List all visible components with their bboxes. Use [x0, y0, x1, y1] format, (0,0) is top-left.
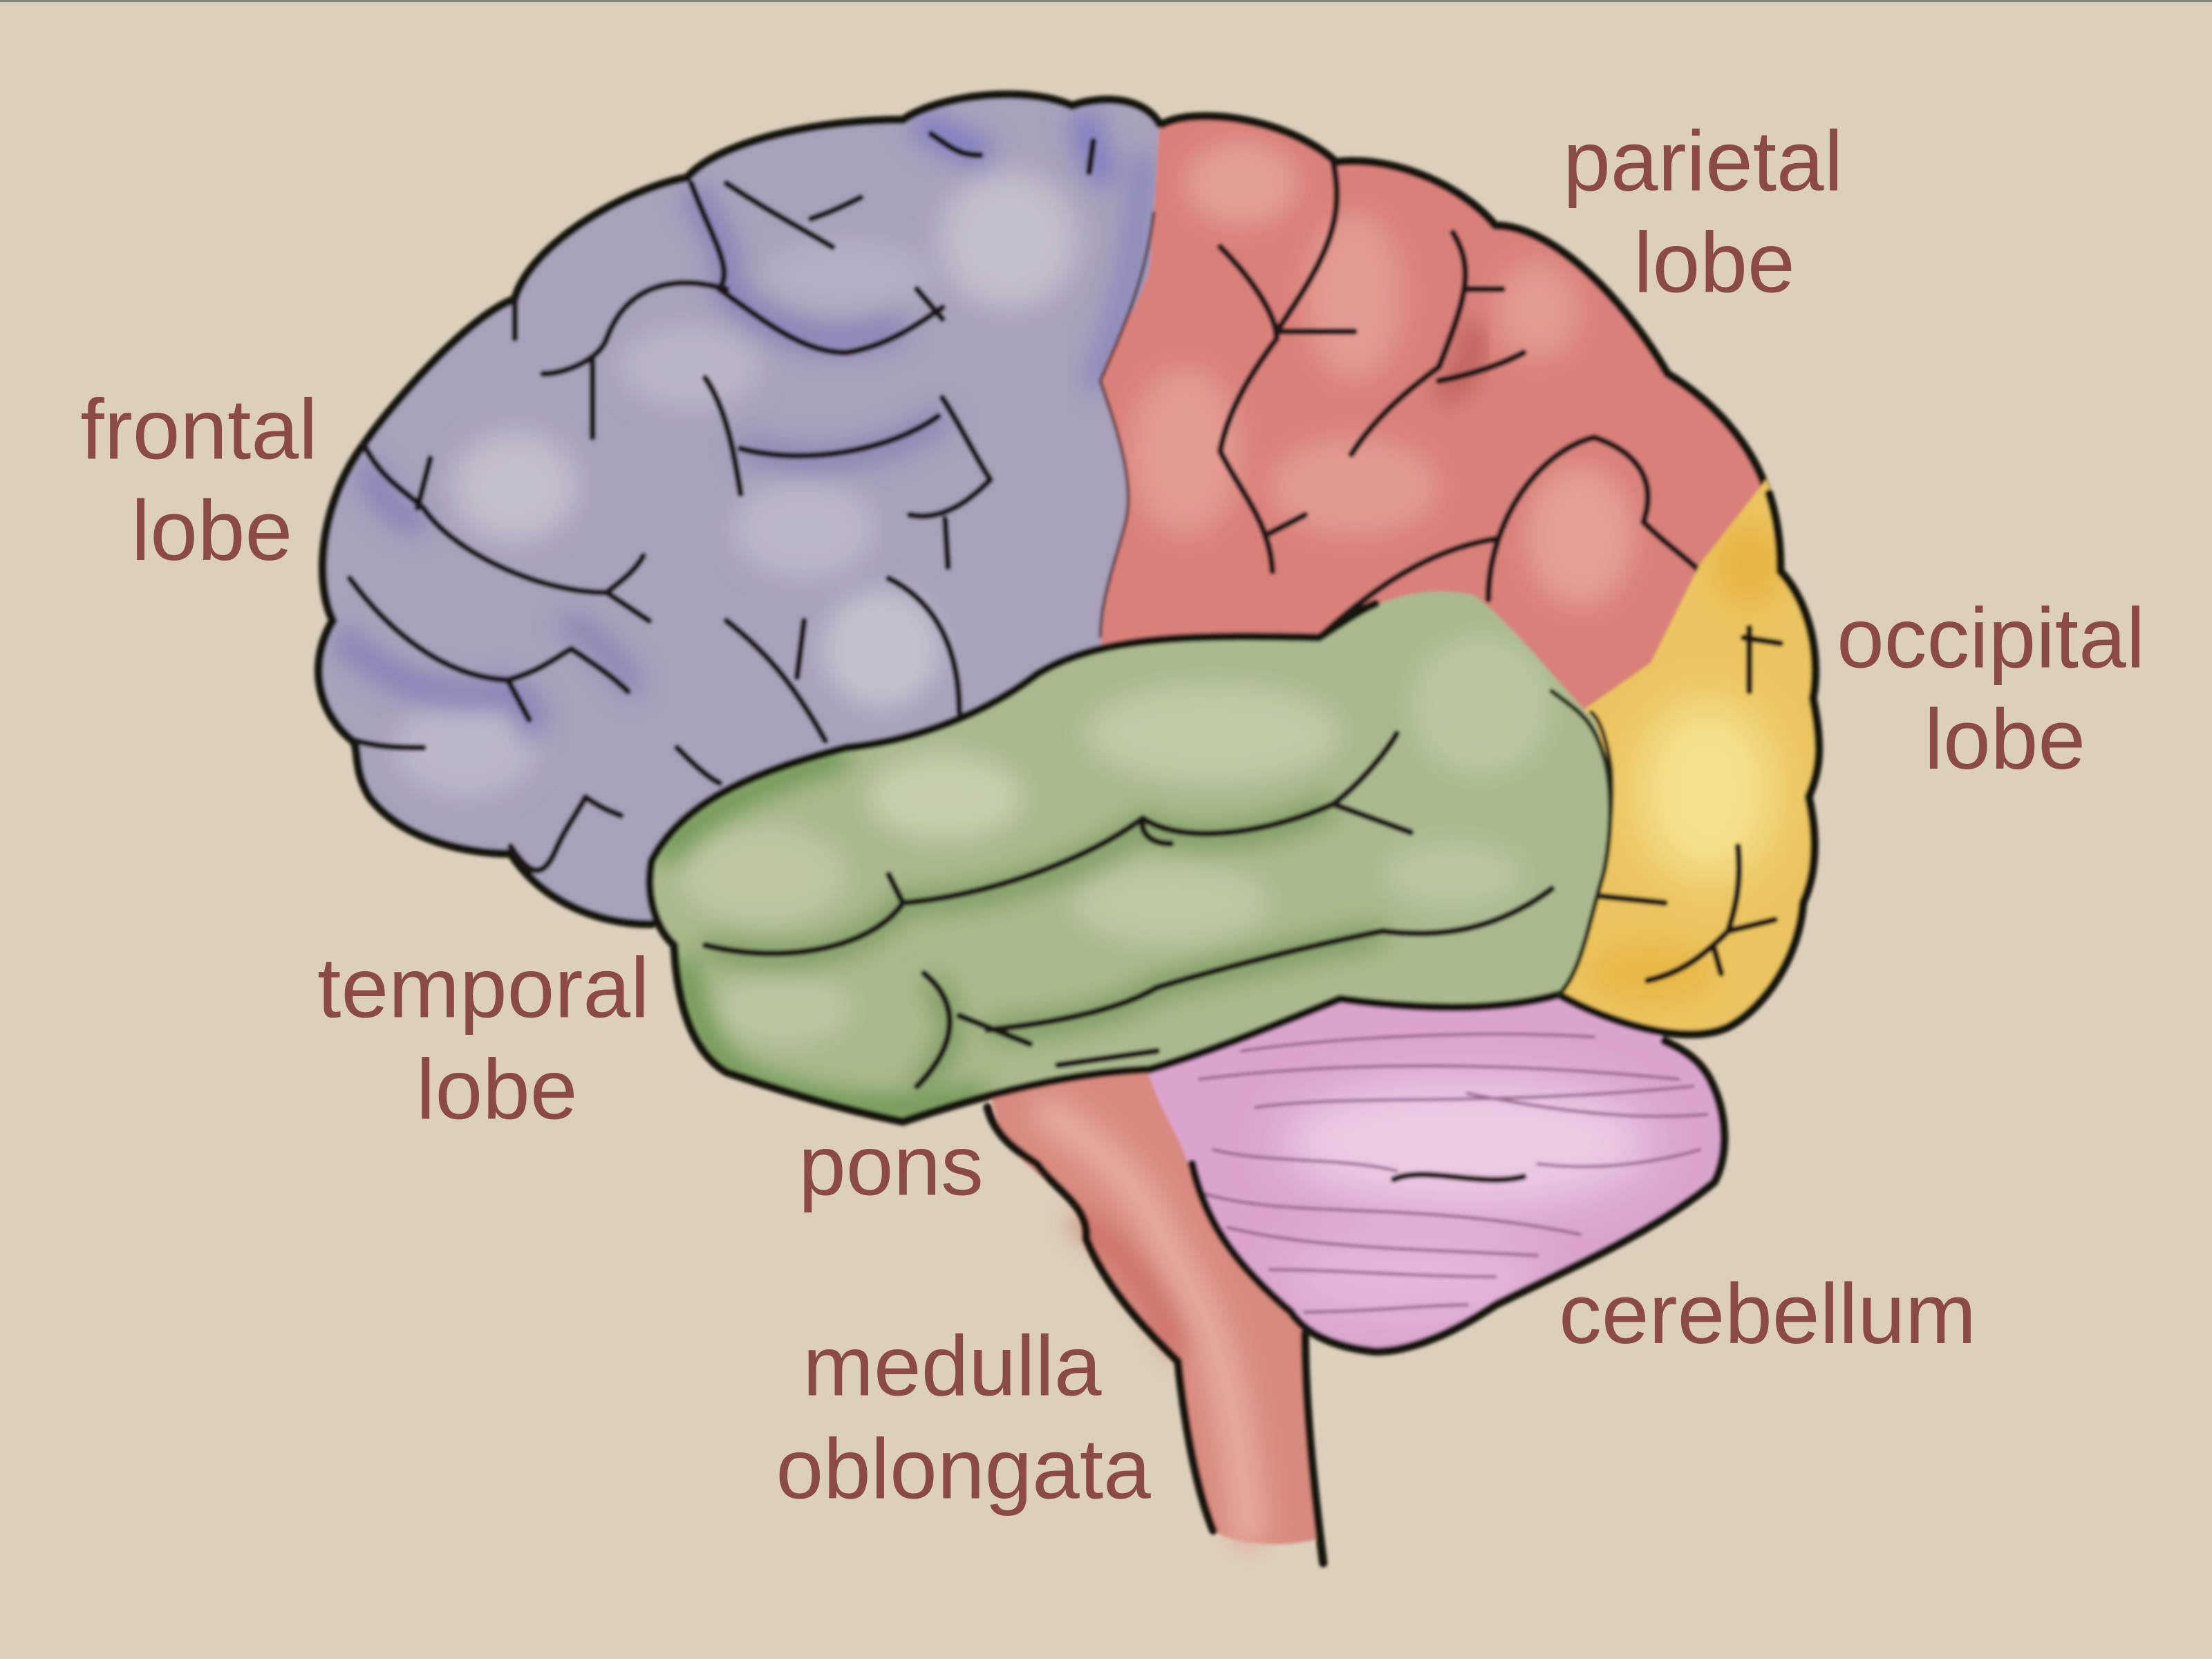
top edge line [0, 0, 2212, 2]
label: frontal lobe: frontal [80, 382, 317, 477]
label: temporal lobe: lobe [416, 1042, 577, 1137]
label: occipital lobe: lobe [1924, 692, 2086, 787]
label: medulla oblongata: medulla [803, 1318, 1102, 1414]
label: parietal lobe [1563, 114, 1843, 310]
label: medulla oblongata: oblongata [776, 1421, 1151, 1517]
occipital lobe [1552, 480, 1819, 1034]
label: temporal lobe: temporal [317, 940, 649, 1035]
brain illustration [319, 95, 1819, 1563]
label: frontal lobe [80, 382, 317, 579]
label: medulla oblongata [776, 1318, 1151, 1517]
brain stem: pons and medulla [988, 1057, 1323, 1563]
cerebellum [1143, 973, 1724, 1351]
parietal lobe [1100, 116, 1774, 733]
label: parietal lobe: lobe [1633, 215, 1795, 310]
label: frontal lobe: lobe [131, 483, 292, 579]
label: occipital lobe [1837, 590, 2145, 787]
frontal lobe [319, 95, 1160, 924]
label: temporal lobe [317, 940, 649, 1137]
label: cerebellum: cerebellum [1559, 1266, 1976, 1362]
label: parietal lobe: parietal [1563, 114, 1843, 209]
label: occipital lobe: occipital [1837, 590, 2145, 686]
temporal lobe [650, 591, 1611, 1121]
label: pons: pons [798, 1118, 984, 1214]
